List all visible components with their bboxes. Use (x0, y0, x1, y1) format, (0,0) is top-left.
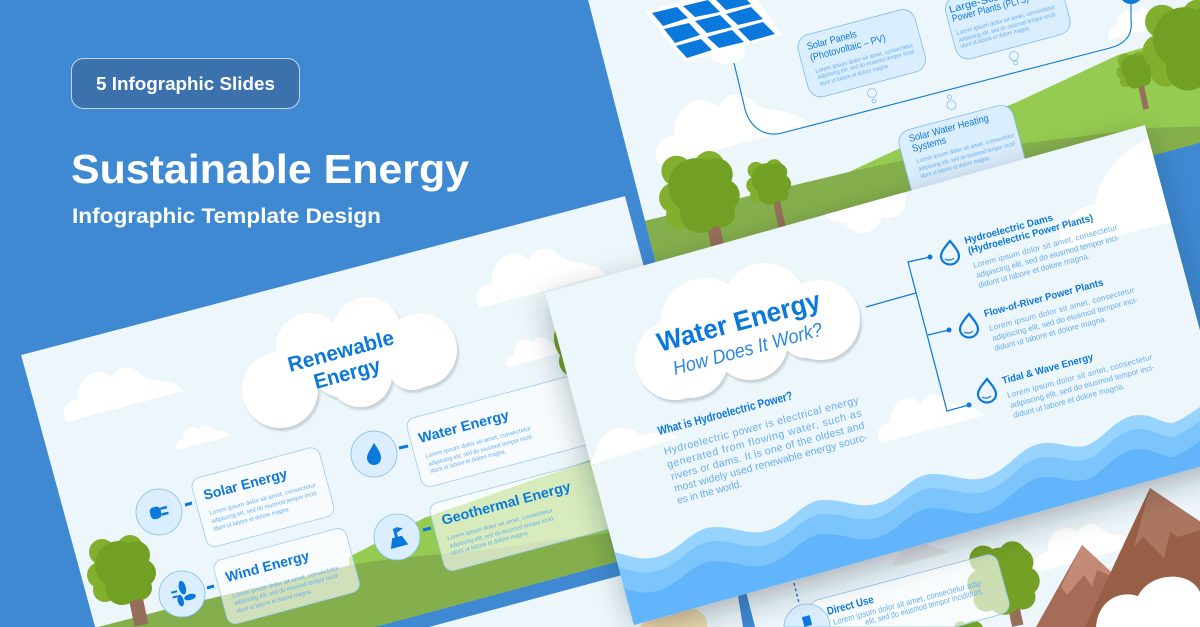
item: wind energy: Wind Energy (224, 547, 311, 585)
mountain: large (1085, 488, 1200, 627)
card: solar panels: Solar Panels (806, 29, 858, 53)
shadow: water slide (545, 135, 1200, 627)
text block: what is hydroelectric power: es in the world. (676, 478, 743, 507)
card: solar water heating: Systems (911, 135, 948, 155)
item: tidal and wave (978, 352, 1156, 420)
mountain: small (1036, 545, 1111, 627)
card: solar water heating: adipiscing elit, sed do eiusmod tempor incid- (918, 141, 1017, 173)
tree: lower small (954, 620, 983, 627)
item: flow-of-river: Lorem ipsum dolor sit amet, consectetur (988, 285, 1136, 333)
item: water energy: Lorem ipsum dolor sit amet, consectetur (425, 426, 532, 460)
sun icon (1122, 0, 1140, 4)
item: water energy: adipiscing elit, sed do eiusmod tempor incid- (428, 434, 534, 468)
item: wind energy: Lorem ipsum dolor sit amet, consectetur (232, 566, 340, 600)
solar panel (645, 0, 782, 62)
subtitle: Infographic Template Design (72, 205, 381, 228)
bracket connector (866, 257, 969, 411)
item: tidal and wave: Tidal & Wave Energy (1001, 352, 1095, 387)
text block: what is hydroelectric power (656, 388, 869, 507)
card: solar water heating: Solar Water Heating (908, 113, 990, 145)
cloud: water energy (635, 263, 860, 400)
tree: large left (659, 151, 740, 246)
text block: what is hydroelectric power: What is Hydroelectric Power? (656, 388, 794, 438)
item: wind energy: adipiscing elit, sed do eiusmod tempor incid- (234, 573, 340, 607)
slide: solar energy types (588, 0, 1200, 262)
item: flow-of-river: adipiscing elit, sed do eiusmod tempor inci- (991, 295, 1139, 343)
card: large-scale solar: adipiscing elit, sed do eiusmod tempor incid- (958, 12, 1057, 44)
card: solar panels: (Photovoltaic – PV) (809, 33, 887, 64)
card text: direct use: elit, sed do eiusmod tempor incididunt. (864, 586, 984, 627)
item: water energy (350, 376, 586, 487)
slide: renewable energy (21, 196, 644, 627)
item: hydroelectric dams (941, 213, 1121, 290)
item: hydroelectric dams: adipiscing elit, sed do eiusmod tempor inci- (975, 233, 1121, 280)
card: solar panels: Lorem ipsum dolor sit amet, consectetur (815, 43, 914, 75)
item: solar energy: Lorem ipsum dolor sit amet, consectetur (209, 483, 317, 517)
item: geothermal energy: Lorem ipsum dolor sit amet, consectetur (447, 508, 554, 542)
item: solar energy: adipiscing elit, sed do eiusmod tempor incid- (211, 491, 319, 525)
tree: left (87, 535, 156, 627)
tree: large right (1142, 0, 1200, 91)
card: solar panels: adipiscing elit, sed do eiusmod tempor incid- (817, 49, 916, 81)
item: tidal and wave: adipiscing elit, sed do eiusmod tempor inci- (1009, 363, 1156, 410)
text block: what is hydroelectric power: most widely used renewable energy sourc- (673, 431, 869, 495)
card: large-scale solar (942, 0, 1073, 65)
card: solar water heating (898, 94, 1026, 190)
item: solar energy: idunt ut labore et dolore magna. (213, 507, 291, 533)
card: solar panels (795, 7, 928, 103)
tree: direct use (967, 541, 1040, 627)
item: hydroelectric dams: (Hydroelectric Power Plants) (967, 213, 1094, 257)
slide: water energy (545, 125, 1200, 625)
item: wind energy (159, 527, 361, 626)
icon: direct use circle (784, 604, 830, 627)
slide: geothermal lower left (429, 546, 743, 627)
wave: middle layer (610, 414, 1200, 625)
text block: what is hydroelectric power: rivers or dams. It is one of the oldest and (670, 420, 866, 483)
cloud: renewable energy (242, 297, 457, 428)
item: water energy: Water Energy (417, 406, 511, 446)
wave: top layer (610, 400, 1200, 625)
cloud title: How Does It Work? (671, 319, 825, 380)
wave: bottom layer (610, 434, 1200, 625)
item: geothermal energy: Geothermal Energy (440, 478, 572, 528)
card: large-scale solar: idunt ut labore et dolore magna. (960, 25, 1031, 50)
cloud title (288, 332, 394, 389)
item: flow-of-river: didunt ut labore et dolore magna. (993, 314, 1108, 353)
item: geothermal energy (374, 461, 608, 571)
ground: light hill (349, 460, 617, 600)
slide: direct use with mountains (746, 466, 1200, 627)
connector line (734, 0, 1131, 134)
tree: small right (1116, 51, 1153, 110)
card text: direct use: Lorem ipsum dolor sit amet, consectetur adip (832, 578, 983, 627)
card: solar panels: idunt ut labore et dolore magna. (819, 63, 890, 88)
title: Sustainable Energy (71, 146, 469, 192)
cloud title: Water Energy (654, 285, 824, 358)
card: large-scale solar: Lorem ipsum dolor sit amet, consectetur (956, 5, 1056, 37)
foreground cloud (1096, 577, 1200, 627)
clouds: background (55, 232, 606, 450)
item: flow-of-river (960, 277, 1139, 353)
cloud title: Energy (311, 354, 383, 394)
item: wind energy: idunt ut labore et dolore magna. (236, 589, 313, 615)
text block: what is hydroelectric power: Hydroelectric power is electrical energy (663, 394, 861, 458)
dashed connector (794, 583, 799, 603)
item: water energy: idunt ut labore et dolore magna. (430, 449, 507, 475)
clouds: white background (590, 130, 1180, 465)
card: direct use (810, 555, 1009, 627)
item: geothermal energy: adipiscing elit, sed do eiusmod tempor incid- (449, 516, 556, 550)
item: tidal and wave: Lorem ipsum dolor sit amet, consectetur (1006, 352, 1154, 400)
ground: dark (98, 533, 617, 627)
item: geothermal energy: idunt ut labore et dolore magna. (451, 530, 530, 557)
clouds: background (645, 0, 1178, 165)
text block: what is hydroelectric power: generated from flowing water, such as (666, 407, 863, 471)
item: tidal and wave: didunt ut labore et dolore magna. (1012, 381, 1126, 420)
cloud title: Renewable (285, 326, 397, 377)
item: solar energy: Solar Energy (202, 465, 289, 503)
badge: 5 infographic slides: 5 Infographic Slides (96, 74, 275, 94)
ground: dark (645, 126, 1200, 262)
item: hydroelectric dams: Hydroelectric Dams (963, 213, 1055, 247)
item: solar energy (136, 446, 336, 549)
tree: right (554, 330, 567, 375)
item: hydroelectric dams: didunt ut labore et dolore magna. (977, 251, 1091, 290)
tree: small left (746, 159, 791, 231)
badge: 5 infographic slides (72, 58, 300, 108)
ground: light hill (849, 48, 1200, 172)
card: solar water heating: Lorem ipsum dolor sit amet, consectetur (916, 133, 1015, 165)
card: solar water heating: idunt ut labore et dolore magna. (920, 155, 991, 180)
card text: direct use: Direct Use (826, 594, 875, 618)
connector dots (928, 254, 972, 408)
item: flow-of-river: Flow-of-River Power Plants (983, 277, 1105, 320)
item: hydroelectric dams: Lorem ipsum dolor sit amet, consectetur (972, 223, 1119, 270)
